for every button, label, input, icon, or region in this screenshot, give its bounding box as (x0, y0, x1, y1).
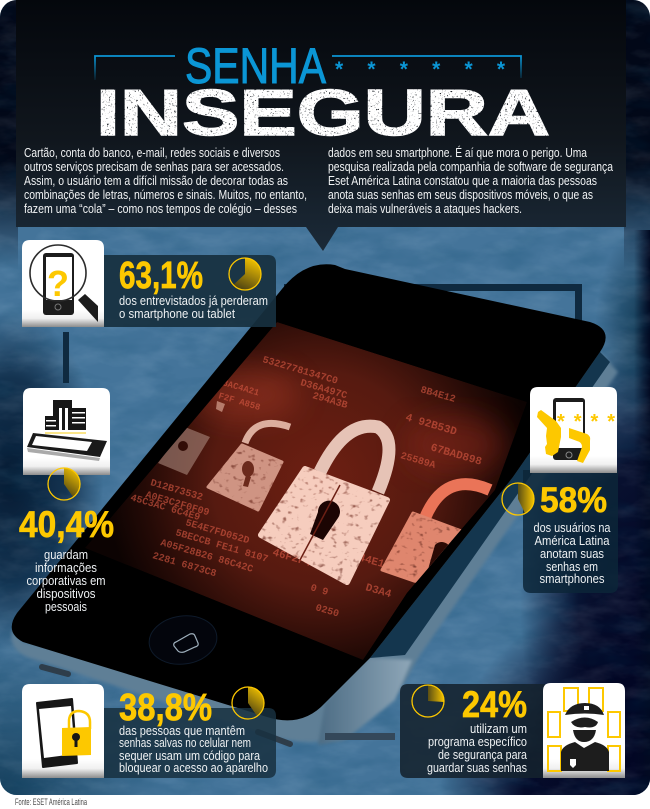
phone metal rim (11, 352, 618, 745)
hex code text: 53227781347C0 (261, 355, 339, 388)
description: informações (35, 560, 97, 575)
intro text left column: Cartão, conta do banco, e-mail, redes sociais e diversos (24, 145, 280, 160)
description: programa específico (428, 734, 527, 749)
home button (146, 612, 220, 668)
value: 24% (462, 684, 527, 725)
description: dos entrevistados já perderam (119, 293, 268, 308)
intro text right column (328, 145, 614, 216)
phone illustration (11, 264, 618, 745)
value: 63,1% (119, 255, 203, 297)
phone screen (85, 322, 527, 660)
card: magnifier icon (22, 240, 104, 327)
pie chart (232, 687, 264, 719)
hex code text: A0E3C2F0F09 (144, 490, 210, 519)
connector bars (63, 284, 582, 388)
stat: 58% (502, 387, 618, 593)
hex code text: A05F28B26 86C42C (159, 538, 254, 576)
screen glow (190, 367, 300, 423)
description: senhas em (546, 559, 598, 574)
intro text left column: outros serviços precisam de senhas para ser acessados. (24, 159, 284, 174)
hex code text: D36A497C (299, 378, 348, 402)
stat: 24% (400, 683, 625, 778)
description: corporativas em (26, 573, 106, 588)
card: magnifier icon: ? (47, 263, 69, 304)
source note: Fonte: ESET América Latina (15, 797, 87, 807)
title (95, 38, 550, 149)
hex code text: 294A3B (311, 391, 349, 412)
hex code text: 2281 6873C8 (151, 551, 217, 580)
hex code text: 46F2F4 (271, 547, 313, 570)
hex code text (129, 355, 483, 621)
hex code text: 44E122 (357, 552, 398, 575)
phone side buttons (42, 667, 290, 744)
description (26, 547, 106, 614)
intro text left column: fazem uma “cola” – como nos tempos de colégio – desses (24, 201, 297, 216)
lock far left (158, 401, 225, 475)
description: senhas salvas no celular nem (119, 735, 251, 750)
bottom connector bar (325, 733, 395, 740)
description: de segurança para (438, 747, 528, 762)
hex code text: D3A4 (364, 582, 393, 601)
description: anotam suas (540, 546, 604, 561)
screen glow right (405, 415, 505, 475)
description (119, 293, 268, 321)
description: sequer usam um código para (119, 748, 261, 763)
intro text right column: dados em seu smartphone. É aí que mora o perigo. Uma (328, 145, 588, 160)
value: 38,8% (119, 687, 212, 729)
stat: 63,1% (22, 240, 276, 327)
intro text left column (24, 145, 307, 216)
pie chart (502, 483, 534, 515)
hex code text: 8AC4A21 (221, 378, 261, 399)
top text panel (16, 0, 626, 251)
description: dispositivos (36, 586, 96, 601)
lock main (261, 426, 389, 582)
description: smartphones (540, 571, 605, 586)
lock right (382, 484, 490, 590)
hex code text: 5E4E7FD052D (184, 518, 250, 547)
hex code text: 5BECCB FE11 8107 (174, 528, 269, 566)
value: 58% (540, 481, 607, 520)
pie chart (229, 258, 261, 290)
value: 40,4% (19, 504, 114, 545)
pie chart (412, 685, 444, 717)
title word: SENHA: SENHA (185, 38, 327, 94)
stat: 40,4% (19, 388, 114, 614)
hex code text: 0 9 (309, 583, 329, 599)
lock left (208, 423, 290, 510)
hex code text: 25589A (399, 451, 437, 472)
card: locked phone icon (22, 684, 104, 778)
hex code text: F2F A858 (217, 391, 261, 413)
description (427, 721, 528, 775)
card: security officer icon (543, 683, 625, 778)
asterisks: ****** (335, 58, 506, 81)
description: guardam (44, 547, 88, 562)
hex code text: D12B73532 (149, 478, 204, 504)
stat: 38,8% (22, 684, 276, 778)
description: pessoais (45, 599, 87, 614)
description: utilizam um (470, 721, 527, 736)
title word: INSEGURA: INSEGURA (96, 76, 550, 149)
phone body (12, 264, 606, 720)
hex code text: 67BAD898 (429, 442, 483, 469)
description: o smartphone ou tablet (119, 306, 235, 321)
hex code text: 0250 (314, 603, 340, 621)
card: corporate icon (23, 388, 110, 475)
description: dos usuários na (534, 520, 611, 535)
intro text left column: Assim, o usuário tem a difícil missão de decorar todas as (24, 173, 288, 188)
description (534, 520, 611, 586)
hex code text: 8B4E12 (419, 385, 457, 406)
hex code text: 4 92B53D (404, 412, 458, 439)
description: América Latina (534, 533, 610, 548)
intro text right column: deixa mais vulneráveis a ataques hackers. (328, 201, 522, 216)
description (119, 723, 268, 775)
description: bloquear o acesso ao aparelho (119, 760, 268, 775)
title frame lines (95, 56, 521, 80)
hex code text: 45C3AC 6C4E9 (129, 493, 201, 524)
card: password icon: **** (557, 411, 615, 433)
pie chart (48, 468, 80, 500)
description: guardar suas senhas (427, 760, 527, 775)
card: password icon (530, 387, 617, 473)
intro text left column: combinações de letras, números e sinais. Muitos, no entanto, (24, 187, 307, 202)
description: das pessoas que mantêm (119, 723, 245, 738)
